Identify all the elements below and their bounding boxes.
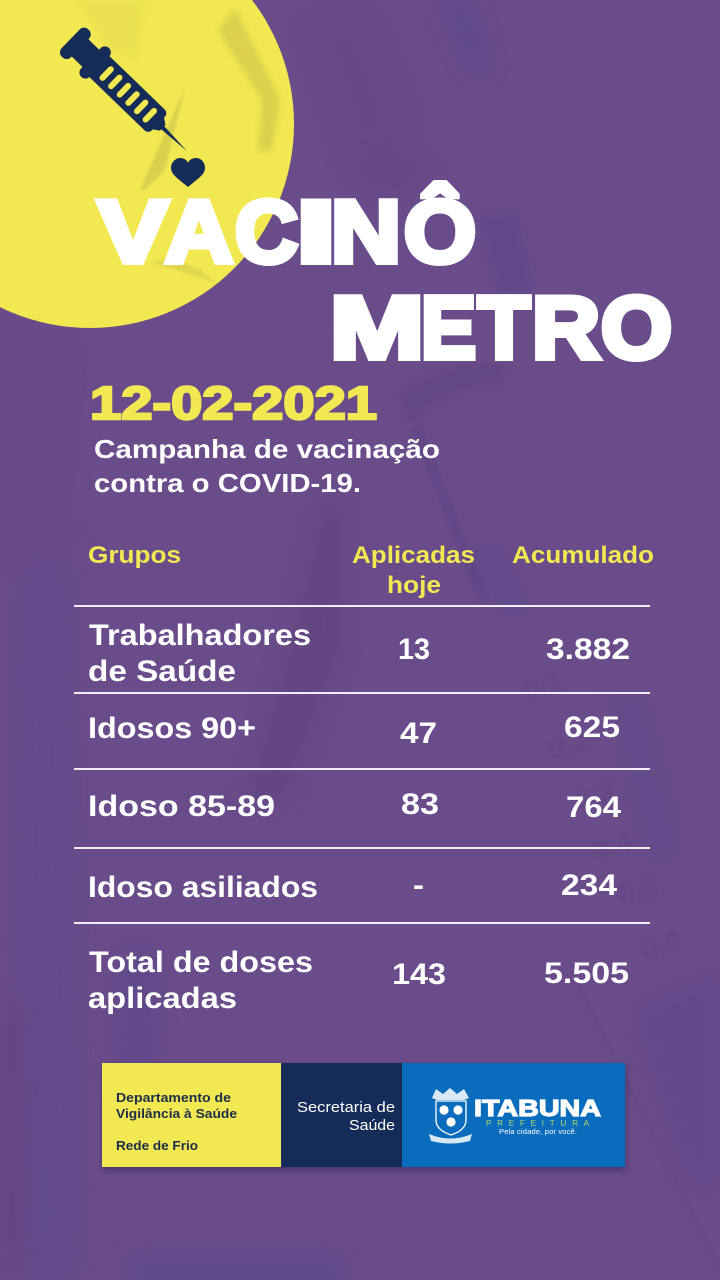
panel: Prefeitura de Itabuna: PREFEITURA (486, 1119, 590, 1128)
panel: Departamento de Vigilância (102, 1063, 281, 1167)
background: faint syringe scale numbers: 0.5 (616, 871, 661, 911)
yellow circle (0, 0, 294, 328)
row: Idoso 85-89: Idoso 85-89 (88, 790, 275, 823)
title: T (478, 278, 530, 377)
row: Idoso asiliados: 234 (561, 869, 617, 902)
table header (88, 542, 654, 599)
row: Idoso 85-89: 83 (401, 788, 439, 821)
row: Idoso asiliados (88, 869, 617, 904)
panel: Secretaria de Saúde: Saúde (349, 1118, 395, 1134)
table header: hoje (387, 572, 441, 599)
background: faint syringe scale numbers: 0.4 (590, 826, 636, 866)
row: Total de doses aplicadas: 5.505 (544, 957, 629, 990)
title: Ô (404, 182, 476, 281)
panel: Prefeitura de Itabuna (402, 1063, 625, 1167)
title: N (331, 182, 401, 281)
panel: Prefeitura de Itabuna: ITABUNA (474, 1095, 601, 1121)
icon: coat of arms (429, 1088, 472, 1144)
panel: Secretaria de Saúde: Secretaria de (297, 1100, 395, 1116)
row: Total de doses aplicadas (88, 946, 629, 1015)
title: R (532, 278, 600, 377)
row: Idoso asiliados: - (413, 869, 424, 902)
subtitle: contra o COVID-19. (94, 468, 361, 498)
row: Idoso 85-89 (88, 788, 621, 824)
row: Idosos 90+: Idosos 90+ (88, 712, 256, 745)
row: Total de doses aplicadas: 143 (392, 958, 446, 991)
row: Trabalhadores de Saúde: Trabalhadores (89, 619, 311, 652)
row: Idoso 85-89: 764 (566, 791, 621, 824)
row: Idoso asiliados: Idoso asiliados (88, 871, 318, 904)
background: faint syringe scale numbers: 0.2 (546, 726, 591, 766)
panel: Departamento de Vigilância: Departamento de (116, 1090, 231, 1105)
background: faint syringe scale numbers: 0.3 (572, 776, 617, 816)
subtitle: Campanha de vacinação (94, 434, 440, 464)
title: I (296, 182, 336, 281)
panel: Departamento de Vigilância: Rede de Frio (116, 1138, 198, 1153)
background: faint syringe scale numbers (520, 666, 684, 966)
panel: Departamento de Vigilância: Vigilância à Saúde (116, 1106, 237, 1121)
icon: syringe (57, 24, 201, 166)
icon: heart (171, 158, 205, 187)
title: V (98, 182, 168, 281)
row: Idosos 90+: 47 (400, 717, 437, 750)
title: A (165, 182, 233, 281)
footer banner (102, 1063, 625, 1167)
title: O (601, 278, 672, 377)
date: 12-02-2021 (90, 377, 377, 429)
title: C (235, 182, 298, 281)
row: Trabalhadores de Saúde: de Saúde (88, 655, 236, 688)
background: faint syringe scale numbers: 0.6 (639, 926, 684, 966)
title: E (421, 278, 476, 377)
title: M (330, 278, 424, 377)
row: Trabalhadores de Saúde (88, 619, 630, 688)
row: Idosos 90+ (88, 711, 620, 750)
row: Trabalhadores de Saúde: 3.882 (546, 633, 630, 666)
panel: Prefeitura de Itabuna: Pela cidade, por você. (499, 1127, 577, 1136)
row: Total de doses aplicadas: aplicadas (88, 982, 237, 1015)
row: Total de doses aplicadas: Total de doses (89, 946, 313, 979)
subtitle (94, 434, 440, 498)
table header: Acumulado (512, 542, 654, 569)
panel: Secretaria de Saúde (281, 1063, 402, 1167)
background: faint syringe scale numbers: 0.1 (520, 666, 565, 706)
row: Idosos 90+: 625 (564, 711, 620, 744)
row: Trabalhadores de Saúde: 13 (398, 633, 430, 666)
table header: Grupos (88, 542, 181, 569)
table header: Aplicadas (352, 542, 475, 569)
title (98, 182, 672, 377)
